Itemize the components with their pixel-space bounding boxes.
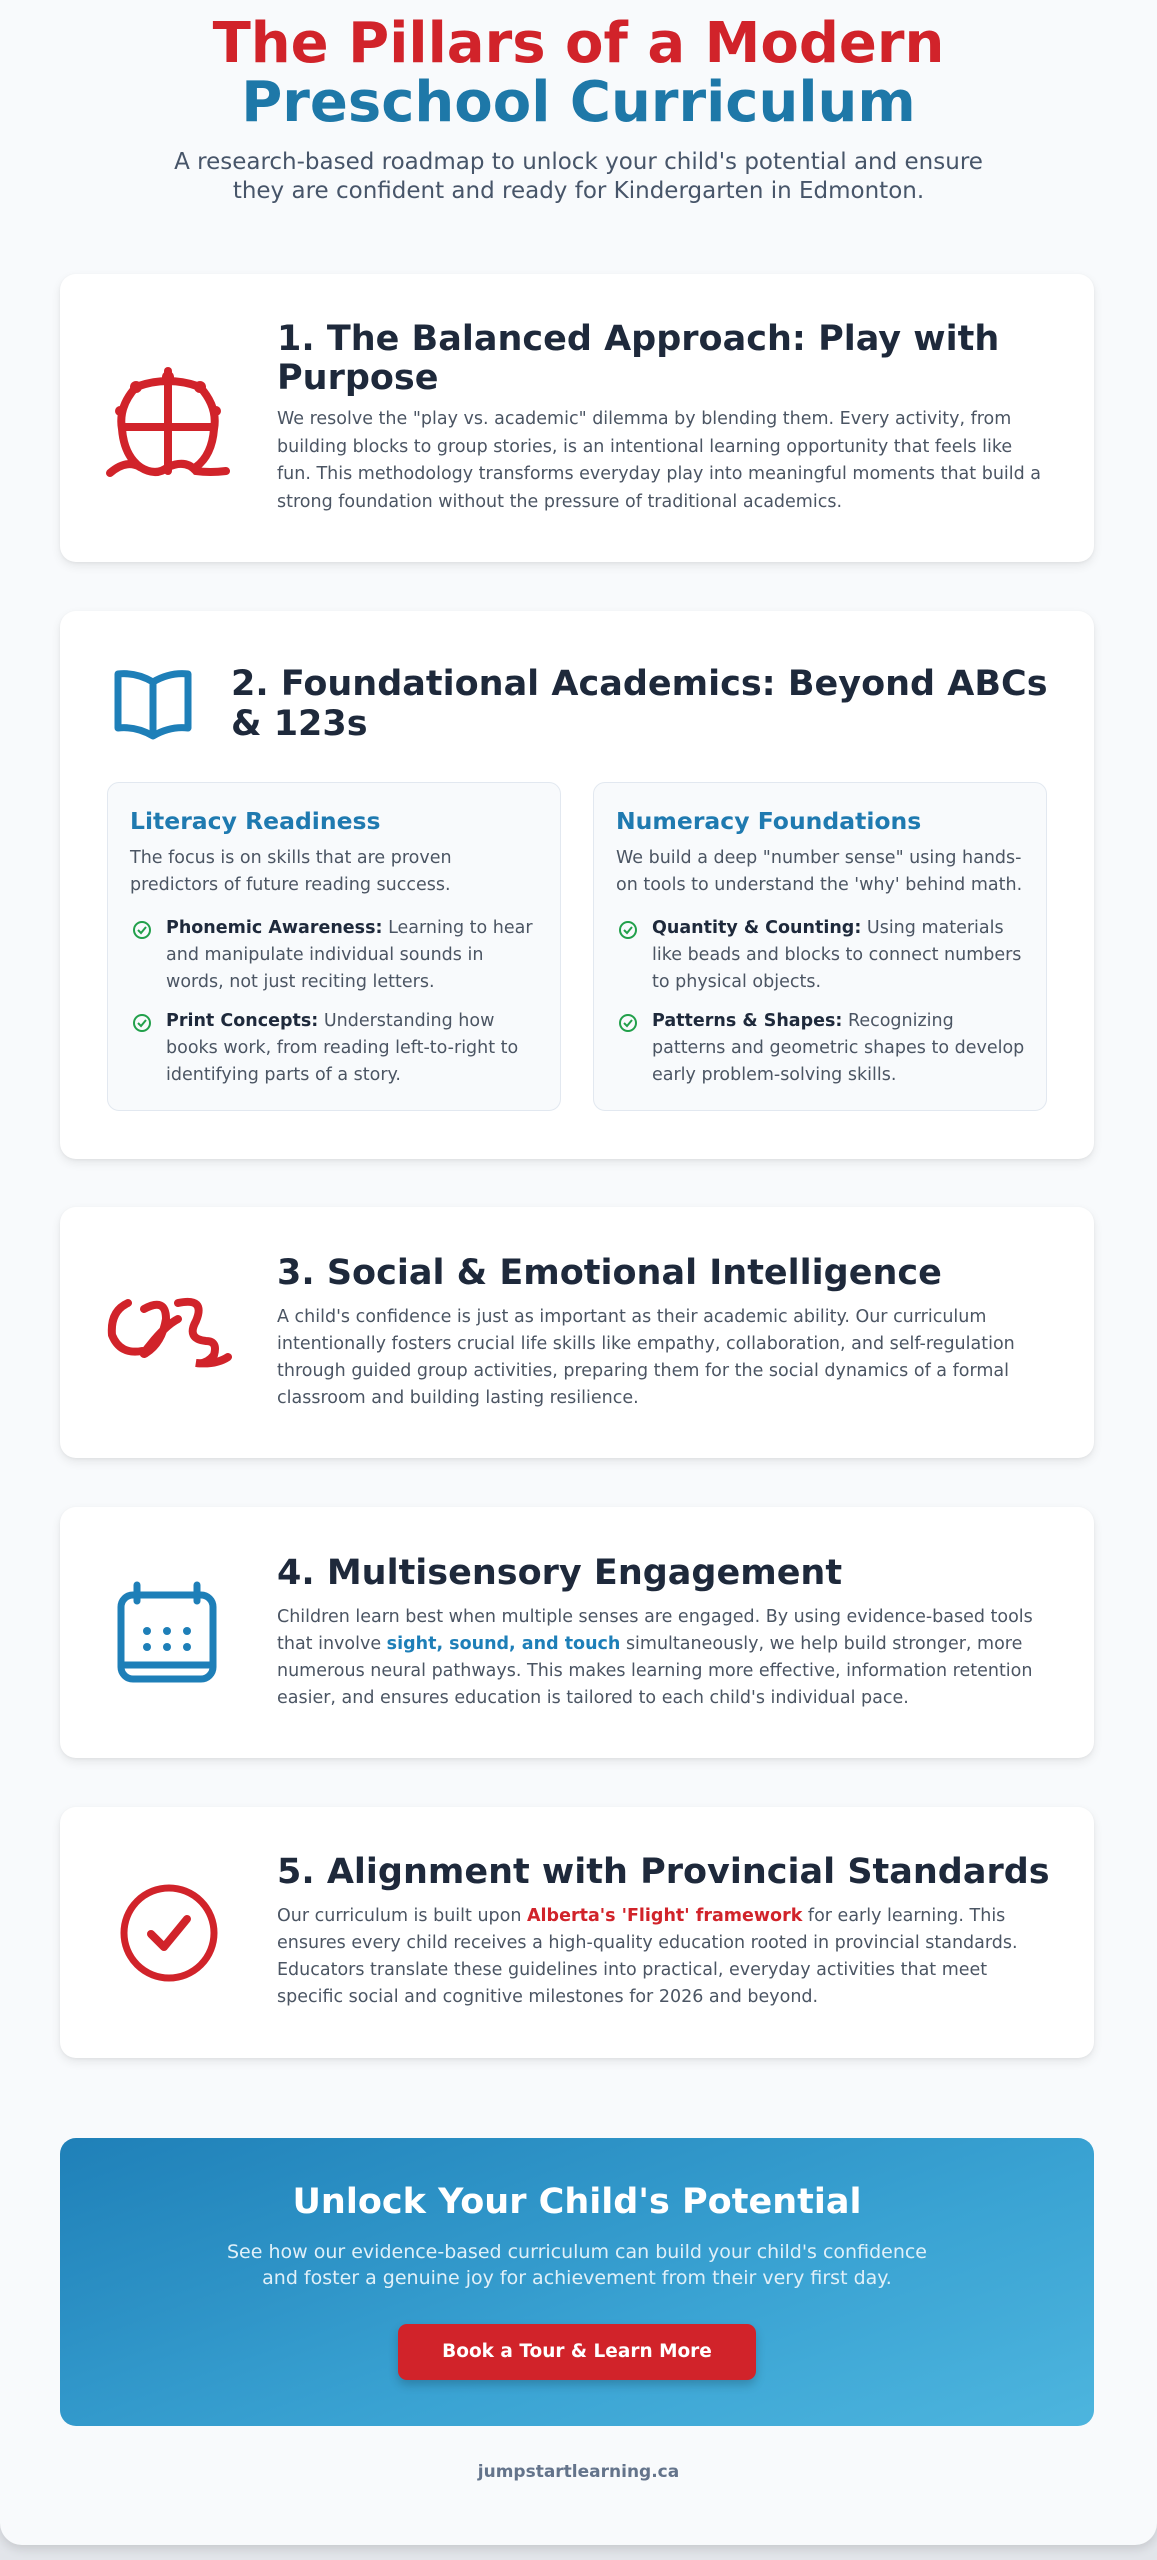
CTA heading: Unlock Your Child's Potential — [293, 2182, 861, 2222]
bullet: print concepts: Print Concepts: Understanding how books work, from reading left-to-right to identifying parts of a story. — [166, 1011, 518, 1085]
panel: numeracy foundations — [593, 782, 1047, 1111]
panel: literacy readiness: The focus is on skills that are proven predictors of future reading success. — [130, 848, 452, 895]
panel: numeracy foundations: Numeracy Foundations — [616, 807, 921, 835]
icon: calendar — [118, 1582, 216, 1682]
card 3: social emotional — [60, 1207, 1094, 1458]
icon: red scribble — [108, 1298, 232, 1368]
heading: 1. The Balanced Approach: Play with Purpose — [277, 319, 999, 398]
body text: Children learn best when multiple senses are engaged. By using evidence-based tools that involve sight, sound, and touch simultaneously, we help build stronger, more numerous neural pathways. This makes learning more effective, information retention easier, and ensures education is tailored to each child's individual pace. — [277, 1607, 1033, 1708]
heading: 2. Foundational Academics: Beyond ABCs & 123s — [231, 664, 1048, 744]
body text: A child's confidence is just as important as their academic ability. Our curriculum intentionally fosters crucial life skills like empathy, collaboration, and self-regulation through guided group activities, preparing them for the social dynamics of a formal classroom and building lasting resilience. — [277, 1307, 1015, 1408]
bullet: quantity: Quantity & Counting: Using materials like beads and blocks to connect numbers to physical objects. — [652, 918, 1021, 992]
button: Book a Tour & Learn More — [442, 2341, 712, 2362]
button — [398, 2324, 756, 2380]
card 5: provincial standards — [60, 1807, 1094, 2058]
title: Preschool Curriculum — [241, 70, 916, 135]
CTA panel — [60, 2138, 1094, 2426]
bullet: patterns: Patterns & Shapes: Recognizing patterns and geometric shapes to develop early problem-solving skills. — [652, 1011, 1024, 1085]
icon: book — [114, 670, 192, 740]
body text: We resolve the "play vs. academic" dilemma by blending them. Every activity, from building blocks to group stories, is an intentional learning opportunity that feels like fun. This methodology transforms everyday play into meaningful moments that build a strong foundation without the pressure of traditional academics. — [277, 409, 1041, 512]
heading: 4. Multisensory Engagement — [277, 1553, 842, 1593]
body text: Our curriculum is built upon Alberta's 'Flight' framework for early learning. This ensures every child receives a high-quality education rooted in provincial standards. Educators translate these guidelines into practical, everyday activities that meet specific social and cognitive milestones for 2026 and beyond. — [277, 1906, 1018, 2007]
panel: literacy readiness — [107, 782, 561, 1111]
icon: red globe — [106, 367, 230, 477]
title: The Pillars of a Modern — [213, 11, 944, 76]
icon: check circle — [120, 1884, 218, 1982]
heading: 5. Alignment with Provincial Standards — [277, 1852, 1050, 1892]
title — [212, 11, 944, 135]
card 1: balanced approach — [60, 274, 1094, 562]
panel: literacy readiness: Literacy Readiness — [130, 807, 380, 835]
subtitle: A research-based roadmap to unlock your child's potential and ensure they are confident and ready for Kindergarten in Edmonton. — [174, 149, 983, 204]
heading: 3. Social & Emotional Intelligence — [277, 1253, 942, 1293]
card 4: multisensory — [60, 1507, 1094, 1758]
CTA text: See how our evidence-based curriculum can build your child's confidence and foster a genuine joy for achievement from their very first day. — [227, 2241, 927, 2289]
bullet: phonemic awareness: Phonemic Awareness: Learning to hear and manipulate individual sounds in words, not just reciting letters. — [166, 918, 533, 992]
card 2: foundational academics — [60, 611, 1094, 1159]
footer: jumpstartlearning.ca — [478, 2462, 679, 2482]
panel: numeracy foundations: We build a deep "number sense" using hands-on tools to understand the 'why' behind math. — [616, 848, 1022, 895]
